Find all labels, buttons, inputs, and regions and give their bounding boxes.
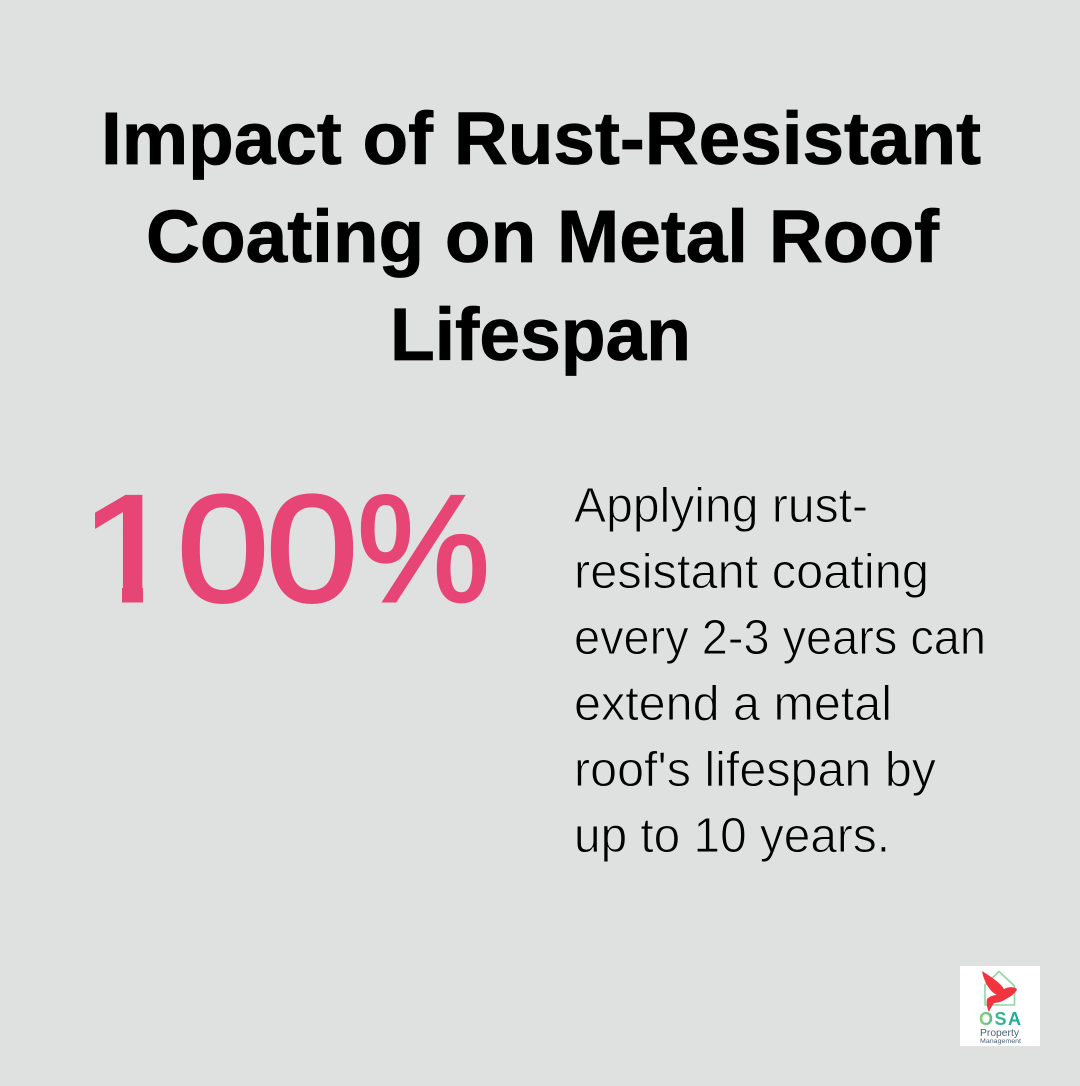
big stat: 100%: 0: [177, 464, 269, 634]
logo text: Property: Property: [980, 1027, 1020, 1039]
logo text: Management: Management: [980, 1038, 1021, 1045]
description text: up to 10 years.: [574, 809, 890, 863]
title: Impact of Rust-Resistant: [101, 97, 981, 180]
big stat: 100%: [95, 493, 486, 604]
title: Coating on Metal Roof: [146, 195, 939, 278]
icon: house outline: [985, 972, 1014, 1005]
big stat: 100%: 0: [266, 464, 358, 634]
logo: OSA Property Management: [960, 966, 1040, 1046]
description text: roof's lifespan by: [574, 743, 936, 797]
big stat: 100%: 1: [80, 464, 180, 634]
description text: Applying rust-: [574, 479, 868, 533]
description text: every 2-3 years can: [574, 611, 986, 665]
description text: extend a metal: [574, 677, 892, 731]
logo wordmark: OSA: OSA: [979, 1009, 1021, 1029]
big stat: 100%: %: [357, 464, 490, 634]
icon: red bird: [982, 971, 1017, 1012]
title: Lifespan: [390, 293, 691, 376]
title: [101, 97, 981, 376]
description text: resistant coating: [574, 545, 929, 599]
description text: [574, 479, 986, 863]
